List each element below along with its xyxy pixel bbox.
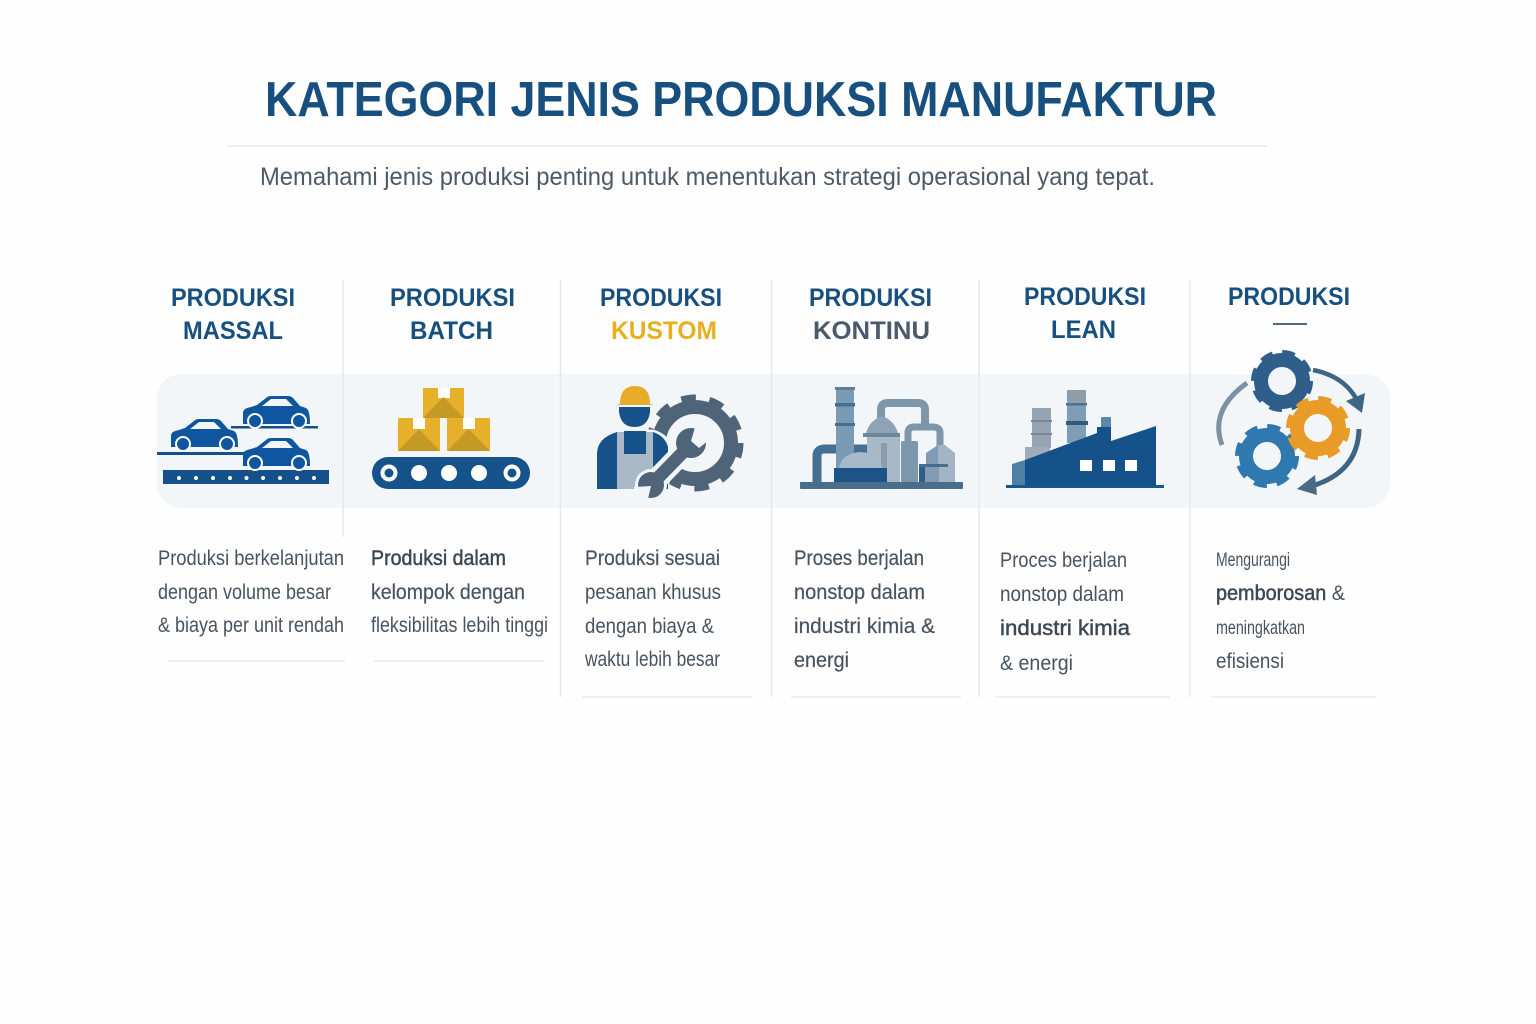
panel: produksi batch bbox=[371, 284, 548, 661]
description: kustom: waktu lebih besar bbox=[584, 648, 720, 671]
heading: batch bbox=[390, 284, 515, 345]
description: produksi terakhir bbox=[1216, 549, 1345, 673]
description: produksi terakhir: efisiensi bbox=[1216, 650, 1284, 673]
description: lean bbox=[1000, 549, 1130, 675]
description: produksi terakhir: Mengurangi bbox=[1216, 549, 1290, 571]
description: produksi terakhir: meningkatkan bbox=[1216, 617, 1305, 639]
icon: cars on conveyor bbox=[157, 396, 329, 484]
description: lean: nonstop dalam bbox=[1000, 583, 1124, 606]
description: massal bbox=[158, 547, 344, 637]
heading: lean bbox=[1024, 283, 1146, 344]
icon: boxes on conveyor bbox=[372, 388, 530, 489]
icon: gears with cycle arrows bbox=[1219, 353, 1365, 495]
heading: produksi dash: PRODUKSI bbox=[1228, 283, 1350, 311]
description: kontinu: Proses berjalan bbox=[794, 547, 924, 570]
description: kontinu bbox=[794, 547, 935, 672]
icon: factory bbox=[1006, 390, 1164, 488]
heading: kontinu bbox=[809, 284, 932, 345]
heading: kustom: PRODUKSI bbox=[600, 284, 722, 312]
description: lean: & energi bbox=[1000, 652, 1073, 675]
description: kustom: pesanan khusus bbox=[585, 581, 721, 604]
description: massal: & biaya per unit rendah bbox=[158, 614, 344, 637]
panel: produksi lean bbox=[995, 283, 1170, 697]
heading: kontinu: PRODUKSI bbox=[809, 284, 932, 312]
icon band bbox=[157, 374, 1390, 508]
heading: kontinu: KONTINU bbox=[813, 317, 930, 345]
heading: produksi dash bbox=[1228, 283, 1350, 325]
description: massal: dengan volume besar bbox=[158, 581, 331, 604]
panel: produksi kustom bbox=[582, 284, 752, 697]
panel: produksi terakhir bbox=[1211, 283, 1376, 697]
panel: produksi kontinu bbox=[791, 284, 963, 697]
title: KATEGORI JENIS PRODUKSI MANUFAKTUR bbox=[265, 73, 1217, 127]
heading: massal: MASSAL bbox=[183, 317, 283, 345]
heading: kustom bbox=[600, 284, 722, 345]
description: kontinu: industri kimia & bbox=[794, 615, 935, 638]
icon: worker with gear and wrench bbox=[597, 386, 740, 503]
description: lean: Proces berjalan bbox=[1000, 549, 1127, 572]
description: batch bbox=[371, 547, 548, 637]
description: kustom: dengan biaya & bbox=[585, 615, 714, 638]
description: kontinu: nonstop dalam bbox=[794, 581, 925, 604]
description: lean: industri kimia bbox=[1000, 617, 1130, 640]
icon: chemical plant bbox=[800, 387, 963, 489]
description: batch: Produksi dalam bbox=[371, 547, 506, 570]
description: massal: Produksi berkelanjutan bbox=[158, 547, 344, 570]
description: batch: fleksibilitas lebih tinggi bbox=[371, 614, 548, 637]
heading: lean: LEAN bbox=[1051, 316, 1116, 344]
heading: massal: PRODUKSI bbox=[171, 284, 295, 312]
description: kontinu: energi bbox=[794, 649, 849, 672]
description: kustom: Produksi sesuai bbox=[585, 547, 720, 570]
description: kustom bbox=[584, 547, 721, 671]
heading: kustom: KUSTOM bbox=[611, 317, 717, 345]
heading: lean: PRODUKSI bbox=[1024, 283, 1146, 311]
heading: batch: PRODUKSI bbox=[390, 284, 515, 312]
heading: batch: BATCH bbox=[410, 317, 493, 345]
subtitle: Memahami jenis produksi penting untuk menentukan strategi operasional yang tepat. bbox=[260, 163, 1155, 191]
description: produksi terakhir: pemborosan & bbox=[1216, 582, 1345, 605]
heading: massal bbox=[171, 284, 295, 345]
panel: produksi massal bbox=[157, 284, 345, 661]
description: batch: kelompok dengan bbox=[371, 581, 525, 604]
